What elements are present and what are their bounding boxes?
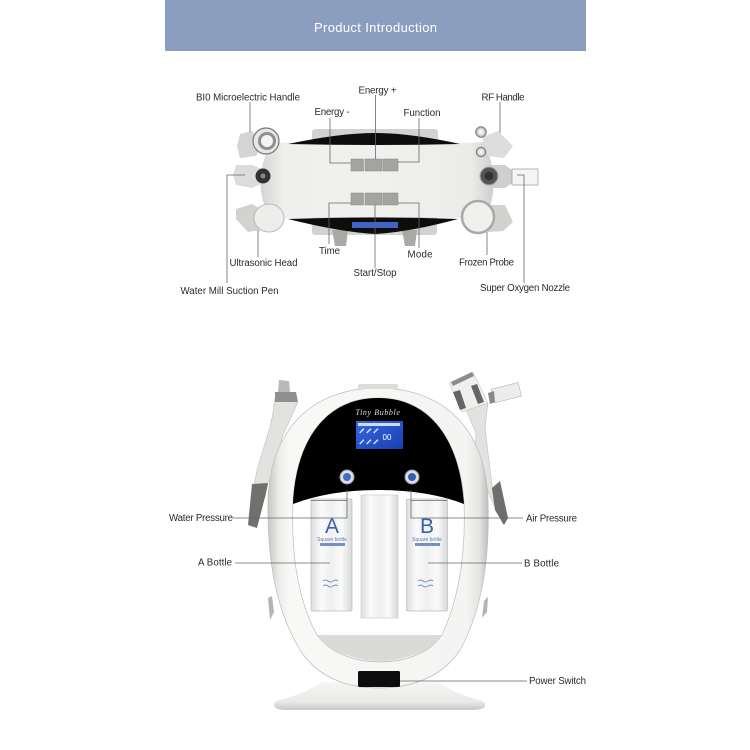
blue display screen: 00 — [383, 433, 392, 442]
power switch — [358, 671, 400, 687]
label: Air Pressure — [411, 490, 577, 524]
RF handle icon — [476, 126, 513, 158]
brand text: Tiny Bubble — [355, 408, 401, 417]
bottle B: B — [420, 515, 434, 538]
label: A Bottle: A Bottle — [198, 558, 232, 568]
label: Energy - — [314, 107, 351, 163]
label: Water Pressure: Water Pressure — [169, 513, 233, 524]
black panel — [293, 398, 464, 504]
label: Water Pressure — [169, 490, 347, 524]
BIO microelectric handle icon — [237, 128, 279, 158]
right knob — [405, 470, 419, 484]
ultrasonic head icon — [236, 204, 284, 232]
label: Mode: Mode — [408, 250, 432, 260]
label: Function: Function — [404, 108, 440, 119]
base — [274, 682, 485, 710]
bottom tray — [317, 635, 442, 662]
device body — [260, 142, 494, 219]
label: Energy + — [358, 86, 397, 159]
label: Water Mill Suction Pen — [180, 175, 278, 297]
label: B Bottle: B Bottle — [524, 558, 559, 570]
header band: Product Introduction: Product Introduction — [314, 20, 437, 35]
bottle A: A — [325, 515, 339, 538]
center bottle — [361, 495, 398, 618]
bottle A — [311, 499, 352, 611]
label: Super Oxygen Nozzle — [480, 175, 570, 294]
top-view device — [233, 126, 538, 246]
label: RF Handle: RF Handle — [482, 92, 524, 104]
bottom display strip — [288, 218, 458, 234]
upper button group — [351, 159, 398, 171]
label: Super Oxygen Nozzle: Super Oxygen Nozzle — [480, 283, 570, 294]
bottles — [311, 495, 448, 618]
label: A Bottle — [198, 558, 330, 568]
bottle A: Square bottle — [317, 537, 347, 543]
front-view device — [248, 372, 521, 710]
right handpiece — [449, 372, 521, 525]
label: B Bottle — [428, 558, 559, 570]
top black strip — [288, 133, 460, 145]
label: Energy -: Energy - — [314, 107, 350, 118]
label: Time — [319, 203, 351, 257]
ring body — [268, 388, 488, 688]
label: Mode — [398, 203, 432, 260]
left handpiece — [248, 380, 298, 528]
water mill suction pen icon — [233, 165, 270, 188]
label: Start/Stop: Start/Stop — [354, 268, 396, 279]
label: Time: Time — [319, 246, 340, 257]
label: BI0 Microelectric Handle — [196, 92, 300, 132]
label: Power Switch: Power Switch — [529, 676, 586, 687]
lower button group — [351, 193, 398, 205]
left knob — [340, 470, 354, 484]
bottle B: Square bottle — [412, 537, 442, 543]
top button — [358, 384, 398, 389]
blue display screen — [356, 421, 403, 449]
front-view callouts — [169, 490, 586, 687]
header band: Product Introduction — [165, 0, 586, 51]
super oxygen nozzle icon — [480, 165, 538, 188]
side buttons — [268, 596, 488, 620]
label: Start/Stop — [354, 205, 396, 279]
label: RF Handle — [482, 92, 524, 133]
label: Ultrasonic Head — [230, 230, 298, 269]
label: Energy +: Energy + — [358, 86, 397, 96]
frozen probe icon — [462, 201, 513, 233]
label: Ultrasonic Head: Ultrasonic Head — [230, 258, 298, 269]
label: Air Pressure: Air Pressure — [526, 514, 577, 524]
top-view callouts — [180, 86, 570, 297]
label: BI0 Microelectric Handle: BI0 Microelectric Handle — [196, 92, 300, 104]
label: Frozen Probe — [459, 232, 514, 268]
label: Water Mill Suction Pen: Water Mill Suction Pen — [180, 286, 278, 297]
device tray and feet — [312, 129, 438, 246]
label: Frozen Probe: Frozen Probe — [459, 258, 514, 268]
label: Function — [398, 108, 440, 162]
bottle B — [406, 499, 448, 611]
